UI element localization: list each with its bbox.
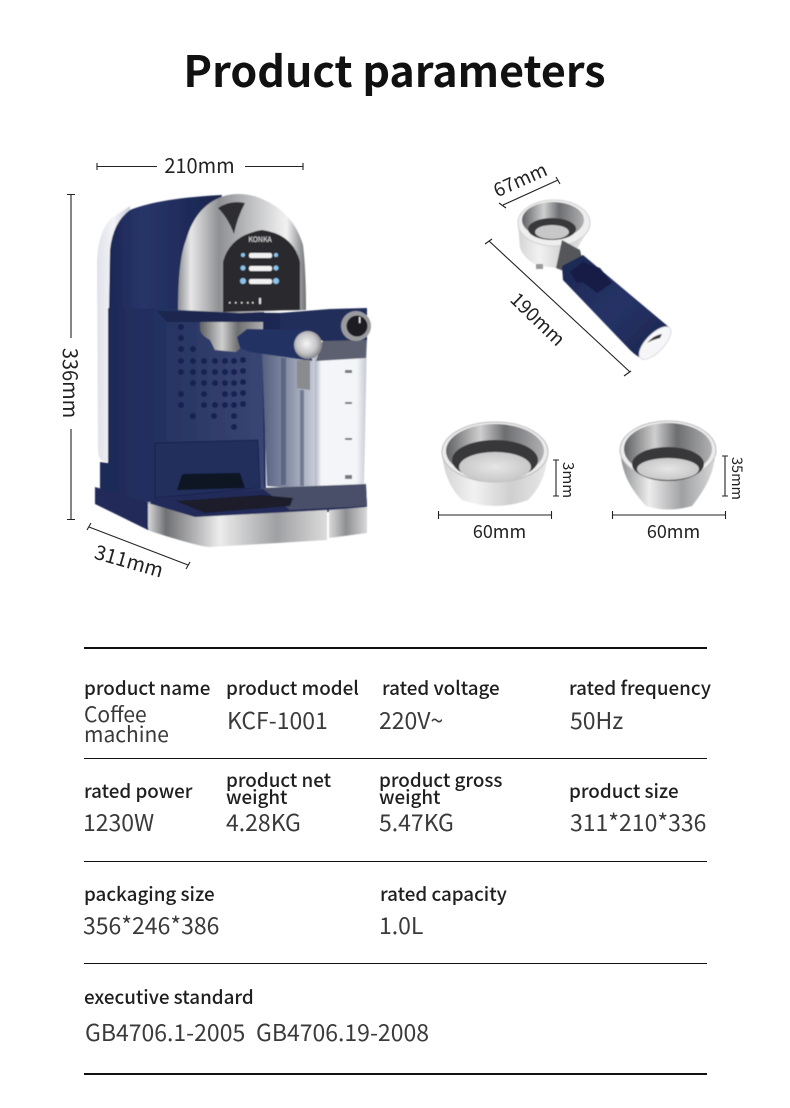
table rules [84,647,707,1075]
panel cup icons [240,253,279,284]
shadow behind group head [258,318,290,340]
jug scale marks [345,370,352,479]
dimension: 35mm / 60mm [612,456,748,544]
spec: rated voltage: rated voltage [382,674,500,701]
spec: product size: 311*210*336 [570,804,706,838]
silver head [178,194,306,313]
black control panel [223,230,300,312]
perforated dot grille [178,324,246,430]
control knob [341,311,371,341]
spec: rated voltage: 220V~ [379,702,443,736]
spec: rated voltage [379,674,500,736]
spout feet [536,264,543,269]
dimension: 35mm / 60mm: 60mm [647,518,700,544]
spec: packaging size: packaging size [84,880,215,907]
handle neck [556,240,582,272]
glass water column [262,350,316,490]
dimension: 67mm: 67mm [489,155,551,203]
drip tray grid [176,495,293,513]
dimension: 3mm / 60mm [438,460,579,544]
spec: packaging size [83,880,219,941]
lower blue body [100,308,266,502]
spec: product gross weight [379,766,502,838]
spec: product size: product size [569,777,679,804]
spec: product model [226,674,359,736]
spec: product gross weight: 5.47KG [379,804,454,838]
shallow filter basket [442,422,548,506]
panel indicator lights [229,298,261,304]
jug lid shadow [316,338,367,361]
lower recess panel [167,320,264,495]
spec: packaging size: 356*246*386 [83,907,219,941]
spec: executive standard [84,983,429,1048]
base blue [95,486,367,530]
spec: product net weight: 4.28KG [226,804,301,838]
spec: rated frequency [569,674,711,736]
ledge under head [157,311,285,322]
spec: product name: product name [84,674,210,701]
milk frother top [280,308,367,341]
steam arm [237,329,312,361]
portafilter handle [562,255,670,359]
base right dark glass [262,484,367,510]
group head [200,322,263,352]
portafilter inner [522,202,584,238]
portafilter illustration [518,200,676,364]
upper blue body [109,195,222,312]
handle end cap [634,322,676,364]
spec: rated frequency: 50Hz [570,702,623,736]
deep filter basket [620,421,716,510]
spec: executive standard: GB4706.19-2008 [256,1014,429,1048]
spec: rated power: rated power [84,777,193,804]
spec: rated power: 1230W [83,804,154,838]
drip drawer [155,440,260,498]
spec: product net weight: product net [226,766,332,793]
spec: product gross weight: weight [379,783,441,810]
title: Product parameters [183,38,606,100]
spec: rated capacity: 1.0L [379,907,423,941]
dimension: 336mm height: 336mm [57,348,86,418]
steel side tray [329,507,367,538]
dimension: 3mm / 60mm: 60mm [473,518,526,544]
spec: product size [569,777,706,838]
spec: rated frequency: rated frequency [569,674,711,701]
dimension: 190mm [485,239,631,376]
spec: product model: product model [226,674,359,701]
spec: executive standard: executive standard [84,983,254,1010]
panel buttons [249,253,272,284]
dark notch on head [218,202,245,234]
spec: rated power [83,777,193,838]
spec: product name [84,674,210,749]
spec: product model: KCF-1001 [227,702,328,736]
dimension: 210mm width: 210mm [164,150,235,179]
steam wand [297,360,310,390]
spec: product net weight [226,766,332,838]
dimension: 336mm height [57,194,86,520]
dimension: 3mm / 60mm: 3mm [558,462,579,498]
spec: executive standard: GB4706.1-2005 [85,1014,245,1048]
coffee machine illustration [95,194,371,547]
water tank [97,206,130,463]
spec: rated capacity [379,880,507,941]
milk jug [315,338,367,490]
spec: rated capacity: rated capacity [380,880,507,907]
portafilter bowl body [518,224,590,268]
brand label: KONKA [248,235,272,245]
portafilter rim [518,200,590,246]
spec: product name: machine [84,719,169,749]
dimension: 210mm width [97,150,303,179]
dimension: 35mm / 60mm: 35mm [727,457,748,500]
handle latch [570,262,612,293]
drawer cutout [177,473,245,490]
spec: product net weight: weight [226,783,288,810]
spec: product name: Coffee [84,699,147,729]
steam ball [294,331,322,359]
dimension: 190mm: 190mm [505,286,572,352]
dimension: 311mm depth: 311mm [92,536,167,583]
dimension: 311mm depth [87,523,190,583]
steel front tray [148,503,327,547]
spec: product gross weight: product gross [379,766,502,793]
